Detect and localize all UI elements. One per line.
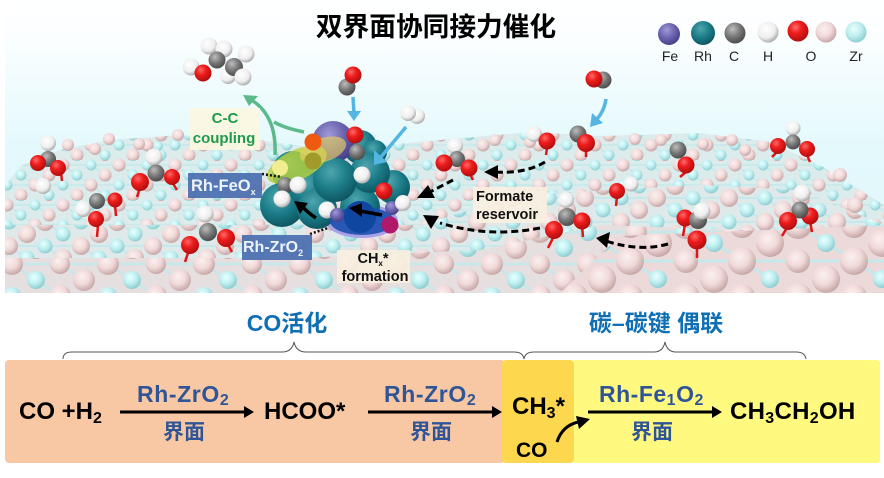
dotted leaders: [262, 174, 328, 234]
legend: atom key: [658, 20, 866, 64]
label: Formate reservoir: Formate: [476, 189, 533, 205]
label: Rh-FeOx: x: [251, 187, 256, 197]
label: Rh-ZrO2: 2: [298, 248, 303, 258]
legend: atom key: Fe: [662, 48, 678, 64]
panel: catalyst surface scene: [5, 0, 884, 293]
arrow: step 2 with catalyst label: [368, 381, 502, 444]
heading: CO activation: CO活化: [247, 310, 327, 336]
arrow: step 3 with catalyst label: Rh-Fe: [599, 381, 667, 407]
icon: CO molecule at right: [586, 70, 612, 88]
legend: atom key: Rh: [694, 48, 712, 64]
Rh-Fe cluster: [260, 121, 411, 238]
species: ethanol product: 3: [765, 410, 774, 427]
species: ethanol product: CH: [730, 398, 765, 425]
icon: H2 molecule: [400, 105, 425, 124]
lattice: near right band: [560, 225, 884, 293]
icon: CO molecule above cluster: [338, 66, 362, 96]
label: CHx* formation: x: [378, 259, 383, 268]
arrow: step 3 with catalyst label: 界面: [631, 421, 673, 444]
label: CHx* formation: [337, 250, 410, 285]
brace: CO activation span: [63, 342, 524, 359]
background: overlap zone: [502, 360, 574, 463]
legend: atom key: C: [729, 48, 739, 64]
species: CO + H2: 2: [93, 410, 102, 427]
species: ethanol product: OH: [819, 398, 856, 425]
panel: reaction pathway: [5, 360, 880, 463]
species: CO + H2: CO +H: [19, 398, 93, 425]
arrow: step 2 with catalyst label: Rh-ZrO: [384, 381, 467, 407]
arrow: CO at right: [590, 99, 606, 127]
surface adsorbates: formate and CO groups: [30, 120, 818, 262]
label: C-C coupling: coupling: [193, 130, 255, 147]
label: C-C coupling: C-C: [212, 110, 238, 127]
species: CH3*: 3: [547, 405, 556, 422]
title: 双界面协同接力催化: [316, 12, 556, 42]
arrow: step 2 with catalyst label: 2: [467, 392, 476, 409]
legend: atom key: O: [806, 48, 817, 64]
arrow: step 3 with catalyst label: O: [676, 381, 694, 407]
arrow: step 1 with catalyst label: 2: [220, 392, 229, 409]
label: CHx* formation: CH: [357, 251, 378, 267]
surface edge atoms: [62, 129, 863, 213]
arrow: step 3 with catalyst label: 2: [694, 392, 704, 409]
arrow: CO adsorption: [347, 97, 361, 121]
species: ethanol product: 2: [810, 410, 819, 427]
legend: atom key: H: [763, 48, 773, 64]
background: coupling zone: [572, 360, 880, 463]
arrow: step 1 with catalyst label: Rh-ZrO: [137, 381, 220, 407]
species: CH3*: CH: [512, 393, 547, 420]
arrows: solid black inside cluster: [294, 201, 382, 218]
arrow: step 3 with catalyst label: 1: [667, 392, 676, 409]
arrow: step 1 with catalyst label: 界面: [163, 421, 205, 444]
arrow: H2 adsorption: [374, 127, 406, 165]
legend: atom key: Zr: [849, 48, 863, 64]
lattice: far band: [5, 132, 884, 240]
heading: C-C bond coupling: 碳–碳键 偶联: [589, 310, 723, 336]
label: Rh-ZrO2: Rh-ZrO: [243, 239, 298, 256]
brace: C-C coupling span: [524, 342, 806, 359]
label: Rh-ZrO2: [242, 235, 312, 260]
label: Formate reservoir: reservoir: [476, 207, 538, 223]
background sky: [5, 0, 884, 293]
species: HCOO*: HCOO*: [264, 398, 346, 425]
label: Formate reservoir: [473, 187, 547, 223]
species: CO co-reactant: CO: [516, 439, 548, 462]
lattice: near band: [5, 225, 884, 293]
label: C-C coupling: [190, 108, 260, 150]
label: Rh-FeOx: [188, 173, 262, 198]
species: CH3*: *: [556, 393, 566, 420]
label: CHx* formation: formation: [342, 269, 408, 285]
arrow: C-C coupling product release: [243, 95, 304, 155]
label: CHx* formation: *: [383, 251, 389, 267]
background: CO activation zone: [5, 360, 505, 463]
icon: gas-phase ethanol molecule: [182, 38, 254, 86]
arrow: step 1 with catalyst label: [120, 381, 254, 444]
species: ethanol product: CH: [774, 398, 810, 425]
arrow: CO insertion: [557, 416, 590, 442]
lattice: middle band: [5, 185, 884, 262]
arrow: step 2 with catalyst label: 界面: [410, 421, 452, 444]
label: Rh-FeOx: Rh-FeO: [191, 177, 251, 195]
arrow: step 3 with catalyst label: [588, 381, 722, 444]
arrows: dashed formate migration: [417, 162, 668, 248]
